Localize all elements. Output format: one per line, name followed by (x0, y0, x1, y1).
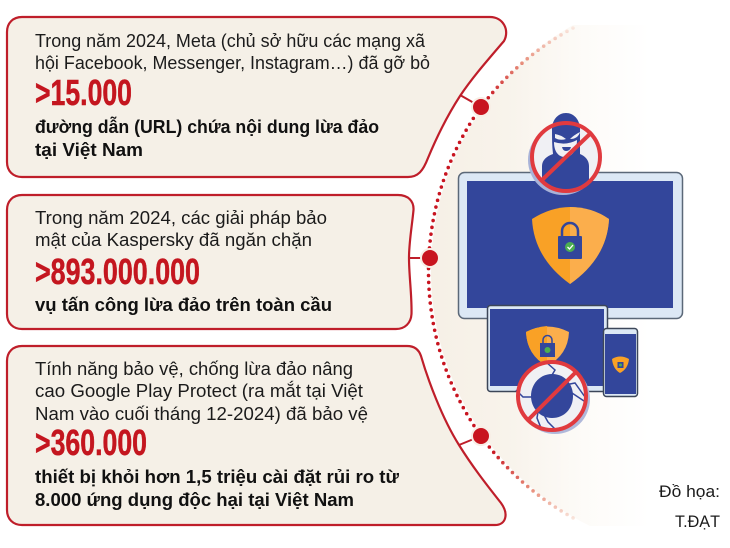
credit: Đồ họa: (659, 482, 720, 501)
credit: T.ĐẠT (675, 512, 720, 531)
icon: tablet (488, 306, 608, 392)
dotted arc (429, 28, 575, 519)
panel: Kaspersky: mật của Kaspersky đã ngăn chặn (35, 230, 312, 250)
icon: large shield (532, 207, 609, 284)
connector: Google (459, 436, 481, 445)
number: 360.000: >360.000 (35, 422, 147, 463)
panel: Google Play Protect (7, 346, 506, 525)
panel: Kaspersky (7, 195, 430, 329)
text: Google intro: Tính năng bảo vệ, chống lừa đảo nâng (35, 359, 353, 379)
number: 893.000.000: >893.000.000 (35, 251, 200, 292)
marker dots (421, 98, 490, 445)
panel: Google Play Protect: cao Google Play Protect (ra mắt tại Việt (35, 380, 363, 401)
icon: monitor (458, 172, 682, 318)
text: Meta intro: Trong năm 2024, Meta (chủ sở hữu các mạng xã (35, 31, 426, 51)
icon: blocked hacker (528, 113, 600, 195)
panel: Google Play Protect: 8.000 ứng dụng độc hại tại Việt Nam (35, 490, 354, 510)
icon: phone (604, 328, 638, 396)
panel: Meta: hội Facebook, Messenger, Instagram…) đã gỡ bỏ (35, 53, 430, 73)
panel: Google Play Protect: Nam vào cuối tháng 12-2024) đã bảo vệ (35, 404, 368, 424)
icon: phone shield (612, 356, 629, 373)
background glow (431, 25, 730, 526)
text: Meta result: đường dẫn (URL) chứa nội dung lừa đảo (35, 116, 379, 137)
text: Kaspersky result: vụ tấn công lừa đảo trên toàn cầu (35, 295, 332, 315)
connector: Meta (460, 95, 481, 107)
icon: blocked virus (516, 362, 590, 434)
number: 15.000: >15.000 (35, 72, 132, 113)
icon: tablet shield (526, 326, 569, 366)
panel: Meta: tại Việt Nam (35, 140, 143, 160)
credit (659, 482, 720, 531)
panel: Meta (7, 17, 506, 177)
text: Google result: thiết bị khỏi hơn 1,5 triệu cài đặt rủi ro từ (35, 467, 400, 487)
text: Kaspersky intro: Trong năm 2024, các giải pháp bảo (35, 208, 327, 228)
connector: Kaspersky (409, 257, 430, 259)
